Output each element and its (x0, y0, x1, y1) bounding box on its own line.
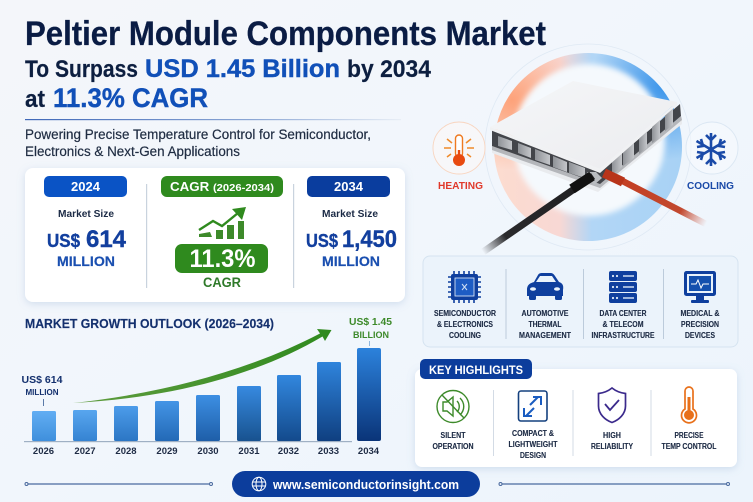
2034 market size: MILLION (322, 253, 380, 269)
year axis labels: 2028 (115, 446, 137, 457)
label: RELIABILITY (591, 442, 634, 451)
label: PRECISION (681, 320, 719, 329)
application: data center (592, 271, 654, 340)
label (508, 429, 558, 460)
year axis labels: 2034 (358, 446, 380, 457)
label (662, 431, 717, 451)
application: semiconductor cooling (434, 271, 496, 340)
label: DESIGN (520, 451, 546, 460)
year axis labels: 2033 (318, 446, 339, 457)
panel: key highlights (415, 359, 737, 467)
2034 market size: 2034 (334, 179, 364, 194)
tagline: Electronics & Next-Gen Applications (25, 144, 240, 159)
year axis labels: 2026 (33, 446, 54, 457)
start value label (22, 375, 63, 406)
highlight: compact design (508, 391, 558, 460)
CAGR figure (161, 176, 283, 290)
label: & ELECTRONICS (437, 320, 493, 329)
cooling label: COOLING (687, 180, 734, 192)
bar chart (22, 317, 392, 457)
year axis labels: 2030 (197, 446, 219, 457)
highlight: high reliability (591, 388, 634, 451)
label: SEMICONDUCTOR (434, 309, 496, 318)
icon: thermometer (682, 387, 696, 423)
panel: applications (423, 256, 738, 347)
year axis labels: 2029 (156, 446, 178, 457)
2034 market size: 1,450 (342, 226, 397, 253)
label: MANAGEMENT (519, 331, 571, 340)
highlight: precise temp control (662, 387, 717, 451)
label: OPERATION (432, 442, 474, 451)
label (592, 309, 654, 340)
subtitle: market value: To Surpass (25, 56, 138, 83)
footer: website: www.semiconductorinsight.com (272, 477, 459, 492)
icon: server (609, 271, 637, 303)
label (432, 431, 474, 451)
label: THERMAL (528, 320, 562, 329)
key highlights heading: KEY HIGHLIGHTS (429, 363, 523, 377)
subtitle: growth rate: 11.3% CAGR (53, 83, 208, 113)
label: TEMP CONTROL (662, 442, 717, 451)
subtitle: market value: USD 1.45 Billion (145, 55, 340, 83)
year axis labels: 2031 (238, 446, 260, 457)
2024 market size: 2024 (71, 179, 101, 194)
subtitle: market value: by 2034 (347, 56, 432, 83)
black wire (483, 176, 593, 252)
year axis labels: 2027 (74, 446, 96, 457)
subtitle: market value (25, 55, 432, 83)
start value label: MILLION (26, 388, 59, 397)
application: medical (680, 271, 720, 340)
label: AUTOMOTIVE (522, 309, 568, 318)
label: DATA CENTER (600, 309, 647, 318)
end value label (349, 317, 392, 346)
label: & TELECOM (602, 320, 644, 329)
red wire (604, 172, 706, 224)
icon: globe (252, 477, 266, 491)
key highlights heading (420, 359, 532, 379)
start value label: US$ 614 (22, 375, 63, 386)
subtitle: growth rate: at (25, 86, 45, 113)
2024 market size: MILLION (57, 253, 115, 269)
highlight: silent operation (432, 390, 474, 451)
icon: monitor (684, 271, 716, 303)
label: SILENT (440, 431, 466, 440)
tagline: Powering Precise Temperature Control for Semiconductor, (25, 127, 371, 142)
icon: cooling snowflake (686, 122, 738, 174)
label (591, 431, 634, 451)
icon: shield check (598, 388, 626, 422)
illustration: Peltier module (433, 44, 738, 252)
2024 market size: US$ (47, 231, 80, 251)
label (519, 309, 571, 340)
icon: muted speaker (437, 390, 469, 422)
icon: chip (448, 271, 481, 303)
icon: expand arrows (518, 391, 547, 421)
CAGR figure: 11.3% (190, 245, 256, 273)
label: LIGHTWEIGHT (508, 440, 558, 449)
year axis labels: 2032 (278, 446, 299, 457)
end value label: US$ 1.45 (349, 317, 392, 328)
application: automotive (519, 273, 571, 340)
chart heading: MARKET GROWTH OUTLOOK (2026–2034) (25, 316, 274, 331)
module body (490, 81, 682, 192)
heating label: HEATING (438, 180, 483, 192)
CAGR figure: CAGR (2026-2034) (170, 180, 274, 194)
year axis labels (33, 446, 380, 457)
end value label: BILLION (353, 330, 389, 340)
tagline (25, 127, 371, 159)
label: PRECISE (674, 431, 704, 440)
icon: heating (433, 122, 485, 174)
gradient ring (485, 44, 691, 250)
label: INFRASTRUCTURE (592, 331, 654, 340)
2024 market size: 614 (86, 226, 127, 253)
footer: website (232, 471, 480, 497)
arrow: growth trend (73, 329, 332, 403)
label (680, 309, 720, 340)
panel: market size and CAGR (25, 168, 405, 302)
label: COMPACT & (512, 429, 554, 438)
label: MEDICAL & (680, 309, 720, 318)
2024 market size (44, 176, 127, 269)
CAGR figure: CAGR (203, 274, 241, 290)
label: COOLING (449, 331, 481, 340)
label: HIGH (603, 431, 621, 440)
label (434, 309, 496, 340)
icon: car (527, 273, 563, 300)
icon: growth chart (199, 207, 246, 239)
label: DEVICES (685, 331, 715, 340)
title: Peltier Module Components Market (25, 15, 546, 53)
2034 market size: Market Size (322, 208, 378, 220)
2024 market size: Market Size (58, 208, 114, 220)
2034 market size (306, 176, 397, 269)
2034 market size: US$ (306, 231, 338, 251)
